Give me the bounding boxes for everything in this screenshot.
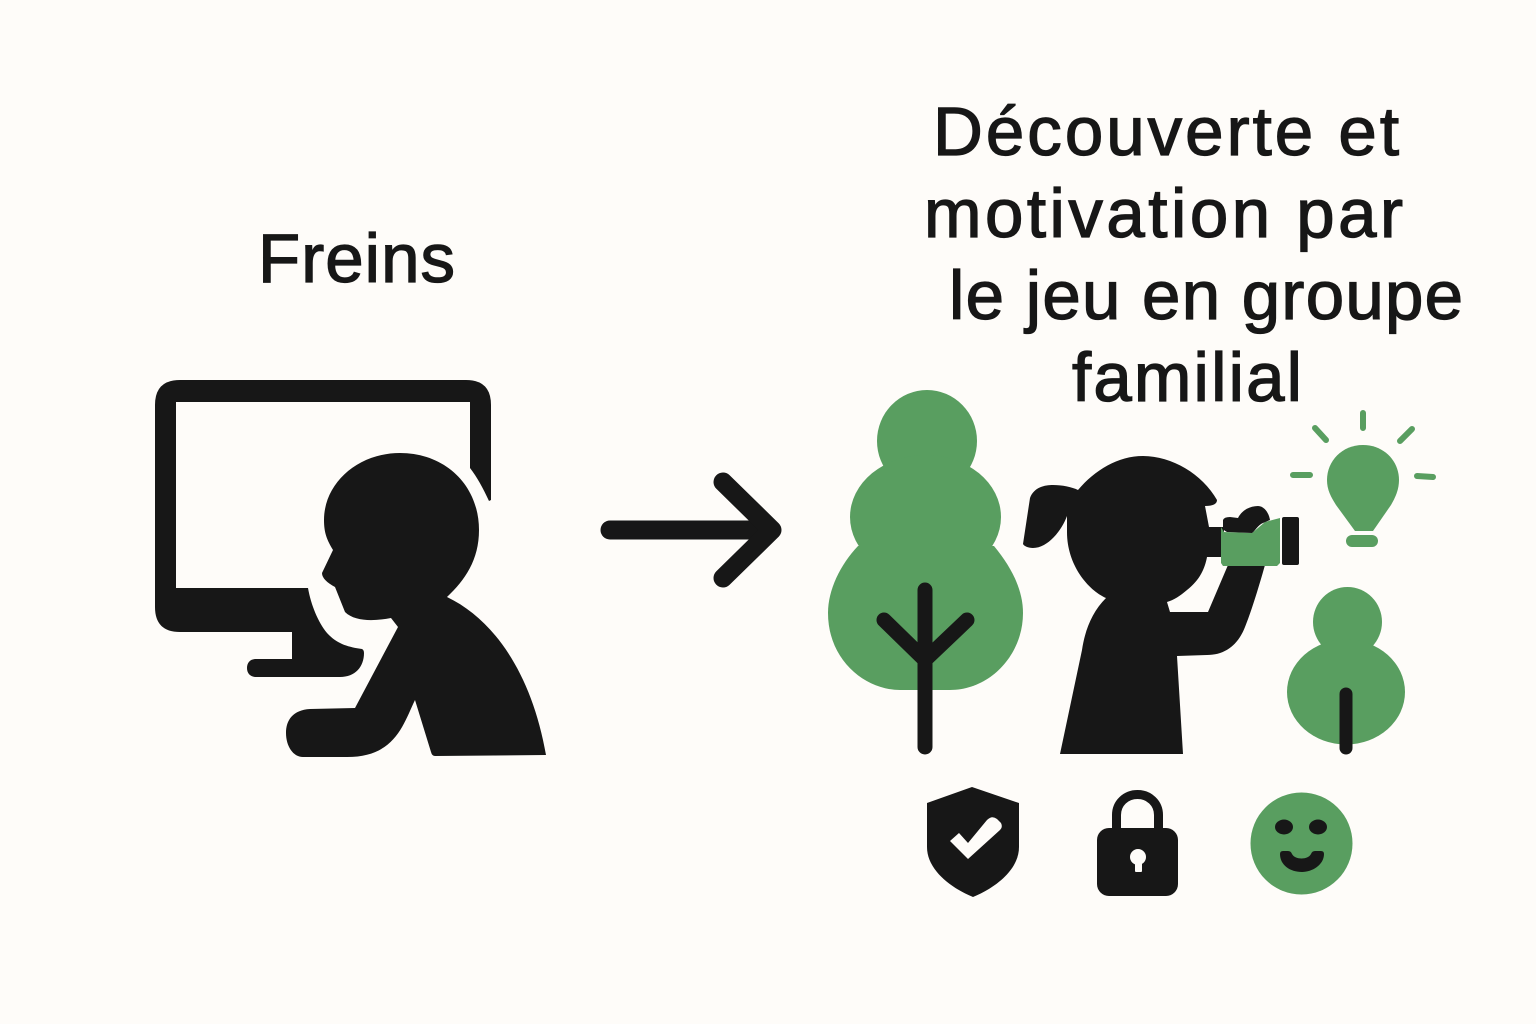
- heading: Découverte et motivation par le jeu en groupe familial: le jeu en groupe: [949, 257, 1463, 334]
- hand on binoculars: [1223, 506, 1270, 533]
- icon: small tree: [1287, 587, 1405, 748]
- heading: Découverte et motivation par le jeu en groupe familial: [924, 93, 1463, 416]
- binoculars eyepiece: [1282, 517, 1299, 565]
- icon: shield with check: [927, 787, 1019, 897]
- arrow: [610, 482, 772, 578]
- binoculars: [1221, 518, 1280, 566]
- icon: girl with binoculars: [1023, 456, 1299, 754]
- computer monitor: [155, 380, 491, 677]
- heading: Découverte et motivation par le jeu en groupe familial: familial: [1072, 339, 1302, 416]
- heading: Découverte et motivation par le jeu en groupe familial: Découverte et: [933, 93, 1399, 170]
- icon: smiley face: [1250, 792, 1352, 894]
- icon: padlock: [1097, 794, 1178, 896]
- heading: Découverte et motivation par le jeu en groupe familial: motivation par: [924, 175, 1403, 252]
- icon: light bulb: [1293, 413, 1433, 547]
- icon: person at computer: [155, 380, 546, 757]
- person silhouette: [286, 453, 546, 757]
- icon: large tree: [828, 390, 1023, 747]
- heading: Freins: Freins: [258, 220, 455, 297]
- girl silhouette: [1023, 456, 1265, 754]
